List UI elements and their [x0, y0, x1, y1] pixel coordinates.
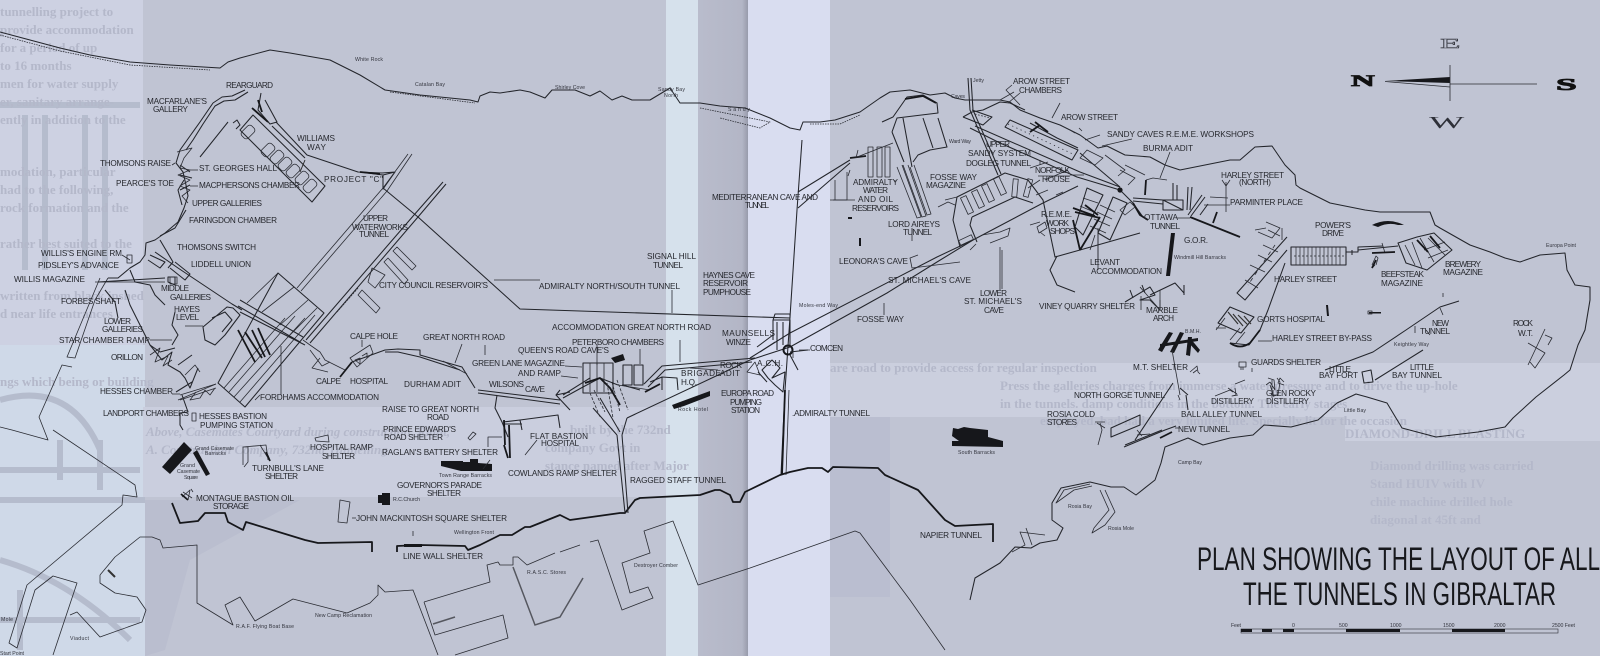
ghost text showing through from the reverse page: employed. bad had a very limited life. Specially lit for the occasion — [1040, 413, 1408, 428]
labels: Harley Street and south-east: GLEN ROCKY — [1266, 389, 1317, 398]
labels: Harley Street and south-east: DISTILLERY — [1266, 397, 1310, 406]
small place names on the base map: Ward Way — [949, 139, 971, 145]
labels: north-west galleries: LEVEL — [176, 313, 199, 322]
labels: central west tunnels: LINE WALL SHELTER — [403, 552, 483, 561]
small place names on the base map: Town Range Barracks — [439, 473, 492, 479]
small place names on the base map: Rock Hotel — [678, 407, 708, 413]
labels: central tunnels over the fold: PUMPING — [730, 398, 762, 407]
labels: central west tunnels: FLAT BASTION — [530, 432, 588, 441]
ghost text showing through from the reverse page: for a period of up — [0, 40, 97, 55]
labels: central west tunnels — [196, 252, 726, 561]
labels: Arow Street and north-east: ACCOMMODATION — [1091, 267, 1162, 276]
labels: Arow Street and north-east: DOGLEG TUNNEL — [966, 159, 1031, 168]
labels: central tunnels over the fold: .ADMIRALTY TUNNEL — [792, 409, 870, 418]
small place names on the base map: Mole — [1, 617, 13, 623]
tunnels: Green Lane, Peterboro and Ragged Staff — [563, 240, 973, 513]
compass rose — [1351, 35, 1577, 132]
labels: central west tunnels: H.Q. — [681, 378, 697, 387]
ghost text showing through from the reverse page: A. Construction Company, 732nd Tunnelling — [145, 442, 388, 457]
small place names on the base map: Little Bay — [1344, 408, 1366, 414]
labels: Harley Street and south-east: MAGAZINE — [1443, 268, 1484, 277]
labels: north-west galleries: THOMSONS SWITCH — [177, 243, 256, 252]
labels: Arow Street and north-east: LEVANT — [1090, 258, 1120, 267]
labels: central tunnels over the fold: NAPIER TUNNEL — [920, 531, 982, 540]
labels: Harley Street and south-east: TUNNEL — [1420, 327, 1450, 336]
small place names on the base map: Catalan Bay — [415, 82, 445, 88]
ghost text showing through from the reverse page: Above, Casemates Courtyard during construction. Right, — [145, 424, 450, 439]
labels: Harley Street and south-east: POWER'S — [1315, 221, 1352, 230]
labels: Harley Street and south-east: BALL ALLEY TUNNEL — [1181, 410, 1262, 419]
labels: central tunnels over the fold: A.C.H. — [757, 359, 783, 368]
labels: central tunnels over the fold: LORD AIREYS — [888, 220, 941, 229]
ghost text showing through from the reverse page: Stand HUIV with IV — [1370, 476, 1486, 491]
small place names on the base map: R.A.S.C. Stores — [527, 570, 566, 576]
labels: north-west galleries: HESSES CHAMBER — [100, 387, 173, 396]
labels: north-west galleries: LIDDELL UNION — [191, 260, 251, 269]
labels: central tunnels over the fold: TUNNEL — [903, 228, 932, 237]
west fortifications and harbour outline — [0, 278, 945, 655]
compass rose: W — [1429, 113, 1465, 132]
labels: central tunnels over the fold: LOWER — [980, 289, 1007, 298]
labels: central west tunnels: HOSPITAL RAMP — [310, 443, 374, 452]
labels: central west tunnels: ACCOMMODATION GREAT NORTH ROAD — [552, 323, 711, 332]
small place names on the base map: R.C.Church — [393, 497, 420, 503]
ghost text showing through from the reverse page: had to the following, — [0, 182, 113, 197]
tunnels: Calpe Hole, Great North Road and Wilsons Cave — [303, 340, 570, 458]
labels: central west tunnels: RAISE TO GREAT NORTH — [382, 405, 479, 414]
ghost text showing through from the reverse page: chile machine drilled hole — [1370, 494, 1513, 509]
labels: Harley Street and south-east: BEEFSTEAK — [1381, 270, 1425, 279]
labels: central tunnels over the fold: RESERVOIR — [703, 279, 748, 288]
scale bar: 0 — [1292, 623, 1295, 629]
labels: north-west galleries: WILLIS'S ENGINE RM — [41, 249, 122, 258]
ghost text showing through from the reverse page: provide accommodation — [0, 22, 134, 37]
tunnels: North Gorge, Ball Alley and Rosia — [1097, 383, 1188, 447]
labels: Arow Street and north-east: SANDY CAVES R.E.M.E. WORKSHOPS — [1107, 130, 1255, 139]
labels: central west tunnels: QUEEN'S ROAD CAVE'S — [518, 346, 610, 355]
tunnels: Comcen and Admiralty — [747, 140, 1078, 475]
tunnels: Levant Accommodation and R.E.M.E. Workshops — [1037, 188, 1127, 270]
ghost text showing through from the reverse page: diagonal at 45ft and — [1370, 512, 1482, 527]
labels: central west tunnels: SIGNAL HILL — [647, 252, 696, 261]
small place names on the base map: White Rock — [355, 57, 383, 63]
labels: Harley Street and south-east — [1047, 221, 1534, 434]
labels: central tunnels over the fold: MEDITERRANEAN CAVE AND — [712, 193, 818, 202]
labels: central west tunnels: GREEN LANE MAGAZINE — [472, 359, 566, 368]
small place names on the base map: Square — [184, 475, 198, 481]
labels: central tunnels over the fold: AND OIL — [858, 195, 893, 204]
labels: Harley Street and south-east: BAY TUNNEL — [1392, 371, 1442, 380]
labels: central tunnels over the fold: ST. MICHAEL'S CAVE — [888, 276, 972, 285]
tunnels: Fordhams Accommodation — [180, 154, 412, 407]
ghost text showing through from the reverse page: rather best suited to the — [0, 236, 132, 251]
labels: Harley Street and south-east: DRIVE — [1322, 229, 1345, 238]
title — [1197, 541, 1600, 612]
labels: central tunnels over the fold — [703, 173, 1135, 540]
labels: central west tunnels: RAGGED STAFF TUNNEL — [630, 476, 726, 485]
labels: central tunnels over the fold: FOSSE WAY — [857, 315, 905, 324]
small place names on the base map: Europa Point — [1546, 243, 1577, 249]
tunnels: Williams Way barrack block — [200, 93, 395, 202]
labels: north-west galleries: MIDDLE — [161, 284, 190, 293]
labels: central tunnels over the fold: MAUNSELLS — [722, 329, 776, 338]
labels: central west tunnels: HOSPITAL — [350, 377, 388, 386]
ghost text showing through from the reverse page — [0, 4, 1534, 527]
labels: central tunnels over the fold: COMCEN — [810, 344, 843, 353]
labels: central west tunnels: WILSONS — [489, 380, 525, 389]
labels: north-west galleries: FARINGDON CHAMBER — [189, 216, 277, 225]
compass rose: S — [1556, 75, 1577, 94]
small place names on the base map: Viaduct — [70, 636, 90, 642]
labels: central tunnels over the fold: PUMPHOUSE — [703, 288, 752, 297]
labels: central west tunnels: ADMIRALTY NORTH/SOUTH TUNNEL — [539, 282, 680, 291]
scale bar: 500 — [1339, 623, 1348, 629]
labels: Harley Street and south-east: MAGAZINE — [1381, 279, 1424, 288]
labels: Harley Street and south-east: LITTLE — [1410, 363, 1435, 372]
labels: north-west galleries: PUMPING STATION — [200, 421, 273, 430]
ghost text showing through from the reverse page: in the tunnels. damp conditions in the bottom. The early stages — [1000, 396, 1347, 411]
tunnels: Buena Vista, Viney Quarry and Marble Arch — [1125, 283, 1284, 398]
labels: central tunnels over the fold: MAGAZINE — [926, 181, 967, 190]
labels: central tunnels over the fold: EUROPA ROAD — [721, 389, 774, 398]
labels: central tunnels over the fold: LEONORA'S CAVE — [839, 257, 909, 266]
labels: central tunnels over the fold: ST. MICHAEL'S — [964, 297, 1023, 306]
ghost map showing through the left margin — [0, 105, 145, 650]
labels: Arow Street and north-east: R.E.M.E. — [1041, 210, 1072, 219]
labels: north-west galleries: FORBES SHAFT — [61, 297, 121, 306]
labels: Harley Street and south-east: MARBLE — [1146, 306, 1179, 315]
tunnels: Arow Street, Sandy system and Norfolk House — [963, 85, 1145, 217]
small place names on the base map: South Barracks — [958, 450, 995, 456]
labels: north-west galleries: ST. GEORGES HALL — [199, 164, 277, 173]
small place names on the base map: Moles-end Way — [799, 303, 838, 309]
labels: central tunnels over the fold: WINZE — [726, 338, 752, 347]
tunnels: Beefsteak and Brewery Magazine — [1326, 221, 1452, 316]
labels: Arow Street and north-east: CHAMBERS — [1019, 86, 1063, 95]
labels: Arow Street and north-east: NORFOLK — [1035, 166, 1071, 175]
labels: north-west galleries: PROJECT "C" — [324, 175, 383, 184]
tunnels: Ottawa, Burma and Parminter — [1120, 178, 1240, 276]
labels: central tunnels over the fold: RESERVOIRS — [852, 204, 900, 213]
labels: north-west galleries: MACPHERSONS CHAMBER — [199, 181, 300, 190]
labels: Arow Street and north-east: UPPER — [986, 140, 1010, 149]
labels: north-west galleries: UPPER — [363, 214, 388, 223]
labels: north-west galleries: WAY — [307, 143, 327, 152]
compass rose: E — [1440, 35, 1461, 51]
ghost text showing through from the reverse page: rock formation and the — [0, 200, 129, 215]
compass rose: N — [1351, 72, 1375, 90]
small place names on the base map: Casemate — [177, 469, 200, 475]
labels: central tunnels over the fold: CAVE — [984, 306, 1005, 315]
labels: Harley Street and south-east: ROCK — [1513, 319, 1534, 328]
labels: Arow Street and north-east — [966, 77, 1304, 276]
labels: north-west galleries: GALLERIES — [102, 325, 144, 334]
labels: central west tunnels: JOHN MACKINTOSH SQUARE SHELTER — [356, 514, 507, 523]
labels: Harley Street and south-east: W.T. — [1518, 329, 1533, 338]
labels: central west tunnels: MONTAGUE BASTION OIL — [196, 494, 294, 503]
ghost text showing through from the reverse page: to 16 months — [0, 58, 72, 73]
labels: Arow Street and north-east: BURMA ADIT — [1143, 144, 1193, 153]
labels: central west tunnels: CITY COUNCIL RESERVOIR'S — [379, 281, 489, 290]
labels: central west tunnels: SHELTER — [427, 489, 461, 498]
labels: north-west galleries: STAR CHAMBER RAMP — [59, 336, 151, 345]
labels: central west tunnels: TURNBULL'S LANE — [252, 464, 325, 473]
tunnels: City Council and waterworks — [306, 182, 790, 343]
scale bar — [1231, 623, 1576, 633]
ghost text showing through from the reverse page: written from black inshed — [0, 288, 145, 303]
labels: north-west galleries: LANDPORT CHAMBERS — [103, 409, 190, 418]
labels: Arow Street and north-east: AROW STREET — [1061, 113, 1118, 122]
labels: Harley Street and south-east: BAY FORT — [1319, 371, 1358, 380]
labels: central west tunnels: GOVERNOR'S PARADE — [397, 481, 483, 490]
labels: central west tunnels: ROAD — [427, 413, 449, 422]
labels: north-west galleries: UPPER GALLERIES — [192, 199, 263, 208]
labels: central tunnels over the fold: WATER — [863, 186, 888, 195]
ghost text showing through from the reverse page: company Govt in — [545, 440, 641, 455]
small place names on the base map: New Camp Reclamation — [315, 613, 372, 619]
labels: central west tunnels: HOSPITAL — [541, 439, 579, 448]
labels: central west tunnels: FORDHAMS ACCOMMODATION — [260, 393, 379, 402]
labels: north-west galleries: ORILLON — [111, 353, 143, 362]
labels: Arow Street and north-east: WORK — [1046, 219, 1070, 228]
labels: north-west galleries: LOWER — [104, 317, 131, 326]
labels: central west tunnels: PRINCE EDWARD'S — [383, 425, 457, 434]
labels: Arow Street and north-east: OTTAWA — [1144, 213, 1179, 222]
labels: Arow Street and north-east: G.O.R. — [1184, 236, 1208, 245]
labels: central west tunnels: PETERBORO CHAMBERS — [572, 338, 665, 347]
ghost text showing through from the reverse page: modation, particular — [0, 164, 116, 179]
labels: Arow Street and north-east: SANDY SYSTEM — [968, 149, 1031, 158]
small place names on the base map: Grand Casemate — [195, 446, 234, 452]
labels: central tunnels over the fold: ADIT — [720, 369, 740, 378]
labels: Arow Street and north-east: (NORTH) — [1239, 178, 1271, 187]
labels: north-west galleries: WILLIAMS — [297, 134, 336, 143]
ghost text showing through from the reverse page: stance named after Major — [545, 458, 689, 473]
labels: Harley Street and south-east: M.T. SHELTER — [1133, 363, 1188, 372]
labels: Harley Street and south-east: ROSIA COLD — [1047, 410, 1095, 419]
ghost text showing through from the reverse page: er, sanitary arrange- — [0, 94, 114, 109]
ghost text showing through from the reverse page: Diamond drilling was carried — [1370, 458, 1534, 473]
small place names on the base map: Camp Bay — [1178, 460, 1202, 466]
labels: Arow Street and north-east: HOUSE — [1042, 175, 1071, 184]
labels: central west tunnels: ROAD SHELTER — [384, 433, 443, 442]
ghost text showing through from the reverse page: are road to provide access for regular inspection — [830, 360, 1098, 375]
small place names on the base map: Rosia Bay — [1068, 504, 1092, 510]
labels: Arow Street and north-east: SHOPS — [1050, 227, 1076, 236]
tunnels: Mediterranean and Admiralty reservoirs — [798, 95, 947, 246]
labels: central west tunnels: RAGLAN'S BATTERY SHELTER — [382, 448, 498, 457]
labels: Harley Street and south-east: LITTLE — [1329, 365, 1352, 374]
labels: central tunnels over the fold: ROCK — [720, 361, 743, 370]
labels: central west tunnels: CALPE — [316, 377, 342, 386]
small place names on the base map: Rosia Mole — [1108, 526, 1134, 532]
small place names on the base map: Grand — [180, 463, 195, 469]
small arrows and leader lines — [95, 93, 1443, 518]
labels: central west tunnels: COWLANDS RAMP SHELTER — [508, 469, 617, 478]
labels: Harley Street and south-east: NEW TUNNEL — [1178, 425, 1230, 434]
labels: Harley Street and south-east: HARLEY STREET BY-PASS — [1272, 334, 1373, 343]
labels: Harley Street and south-east: STORES — [1047, 418, 1078, 427]
tunnels: Little Bay and Keightley Way — [1325, 301, 1552, 383]
labels: central tunnels over the fold: HAYNES CAVE — [703, 271, 756, 280]
ghost text showing through from the reverse page: Press the galleries charges from immerse a water pressure and to drive the up-hole — [1000, 378, 1458, 393]
labels: central west tunnels: TUNNEL — [653, 261, 683, 270]
labels: central tunnels over the fold: TUNNEL — [745, 201, 769, 210]
labels: north-west galleries: WILLIS MAGAZINE — [14, 275, 86, 284]
small place names on the base map: Sandy — [728, 107, 750, 113]
labels: central tunnels over the fold: FOSSE WAY — [930, 173, 978, 182]
labels: central tunnels over the fold: ADMIRALTY — [853, 178, 899, 187]
labels: north-west galleries: THOMSONS RAISE — [100, 159, 172, 168]
labels: Harley Street and south-east: GORTS HOSPITAL — [1257, 315, 1325, 324]
scale bar: Feet — [1231, 623, 1242, 629]
labels: north-west galleries — [14, 81, 409, 430]
ghost text showing through from the reverse page: built by the 732nd — [570, 422, 672, 437]
scale bar: 1500 — [1443, 623, 1455, 629]
labels: north-west galleries: HAYES — [174, 305, 201, 314]
ghost text showing through from the reverse page: d near life entrances — [0, 306, 113, 321]
small place names on the base map: Wellington Front — [454, 530, 495, 536]
labels: Arow Street and north-east: AROW STREET — [1013, 77, 1070, 86]
labels: Harley Street and south-east: ARCH — [1153, 314, 1174, 323]
labels: Harley Street and south-east: BREWERY — [1445, 260, 1482, 269]
labels: north-west galleries: HESSES BASTION — [199, 412, 267, 421]
labels: Harley Street and south-east: NEW — [1432, 319, 1449, 328]
labels: north-west galleries: REARGUARD — [226, 81, 273, 90]
small place names on the base map: Barracks — [205, 451, 226, 457]
scale bar: 1000 — [1390, 623, 1402, 629]
labels: north-west galleries: TUNNEL — [359, 230, 389, 239]
sea wall: Line Wall, Ragged Staff and Napier — [172, 467, 993, 552]
small place names on the base map: North — [664, 93, 678, 99]
labels: north-west galleries: MACFARLANE'S — [147, 97, 208, 106]
landmark buildings — [162, 290, 1160, 547]
tunnels: Harley Street — [1216, 222, 1398, 346]
small place names on the base map: B.M.H. — [1185, 329, 1201, 335]
labels: Harley Street and south-east: NORTH GORGE TUNNEL — [1074, 391, 1165, 400]
labels: north-west galleries: GALLERIES — [170, 293, 212, 302]
labels: Harley Street and south-east: GUARDS SHELTER — [1251, 358, 1321, 367]
labels: Arow Street and north-east: PARMINTER PLACE — [1230, 198, 1304, 207]
small place names on the base map: R.A.F. Flying Boat Base — [236, 624, 294, 630]
small place names on the base map: Caves — [951, 94, 965, 100]
small place names on the base map: Keightley Way — [1394, 342, 1429, 348]
labels: north-west galleries: PEARCE'S TOE — [116, 179, 175, 188]
small place names on the base map: Shirley Cove — [555, 85, 585, 91]
ghost text showing through from the reverse page: DIAMOND-DRILL BLASTING — [1345, 426, 1525, 441]
labels: central west tunnels: CAVE — [525, 385, 546, 394]
labels: Harley Street and south-east: DISTILLERY — [1211, 397, 1255, 406]
small place names on the base map: Sandy Bay — [658, 87, 685, 93]
tunnels: Upper, Middle and Lower Galleries — [98, 90, 248, 430]
labels: Arow Street and north-east: HARLEY STREET — [1221, 171, 1284, 180]
labels: central tunnels over the fold: STATION — [731, 406, 760, 415]
ghost text showing through from the reverse page: men for water supply — [0, 76, 119, 91]
scale bar: 2000 — [1494, 623, 1506, 629]
ghost text showing through from the reverse page: ently in addition to the — [0, 112, 126, 127]
scale bar: 2500 Feet — [1552, 623, 1576, 629]
labels: central west tunnels: SHELTER — [265, 472, 298, 481]
labels: central west tunnels: BRIGADE — [681, 369, 722, 378]
labels: central west tunnels: CALPE HOLE — [350, 332, 399, 341]
labels: central west tunnels: STORAGE — [213, 502, 250, 511]
labels: central tunnels over the fold: VINEY QUARRY SHELTER — [1039, 302, 1135, 311]
labels: north-west galleries: PIDSLEY'S ADVANCE — [38, 261, 120, 270]
tunnels: Fosse Way Magazine — [910, 78, 1140, 292]
small place names on the base map: Destroyer Comber — [634, 563, 678, 569]
small place names on the base map: Jetty — [973, 78, 984, 84]
small place names on the base map: Windmill Hill Barracks — [1174, 255, 1226, 261]
labels: north-west galleries: WATERWORKS — [352, 223, 409, 232]
labels: Harley Street and south-east: HARLEY STREET — [1274, 275, 1337, 284]
labels: central west tunnels: DURHAM ADIT — [404, 380, 461, 389]
labels: central west tunnels: SHELTER — [322, 452, 355, 461]
labels: Arow Street and north-east: TUNNEL — [1150, 222, 1180, 231]
ghost text showing through from the reverse page: tunnelling project to — [0, 4, 113, 19]
labels: central west tunnels: AND RAMP — [518, 369, 562, 378]
labels: north-west galleries: GALLERY — [153, 105, 189, 114]
ghost text showing through from the reverse page: ngs which being or building — [0, 374, 154, 389]
labels: central west tunnels: GREAT NORTH ROAD — [423, 333, 505, 342]
